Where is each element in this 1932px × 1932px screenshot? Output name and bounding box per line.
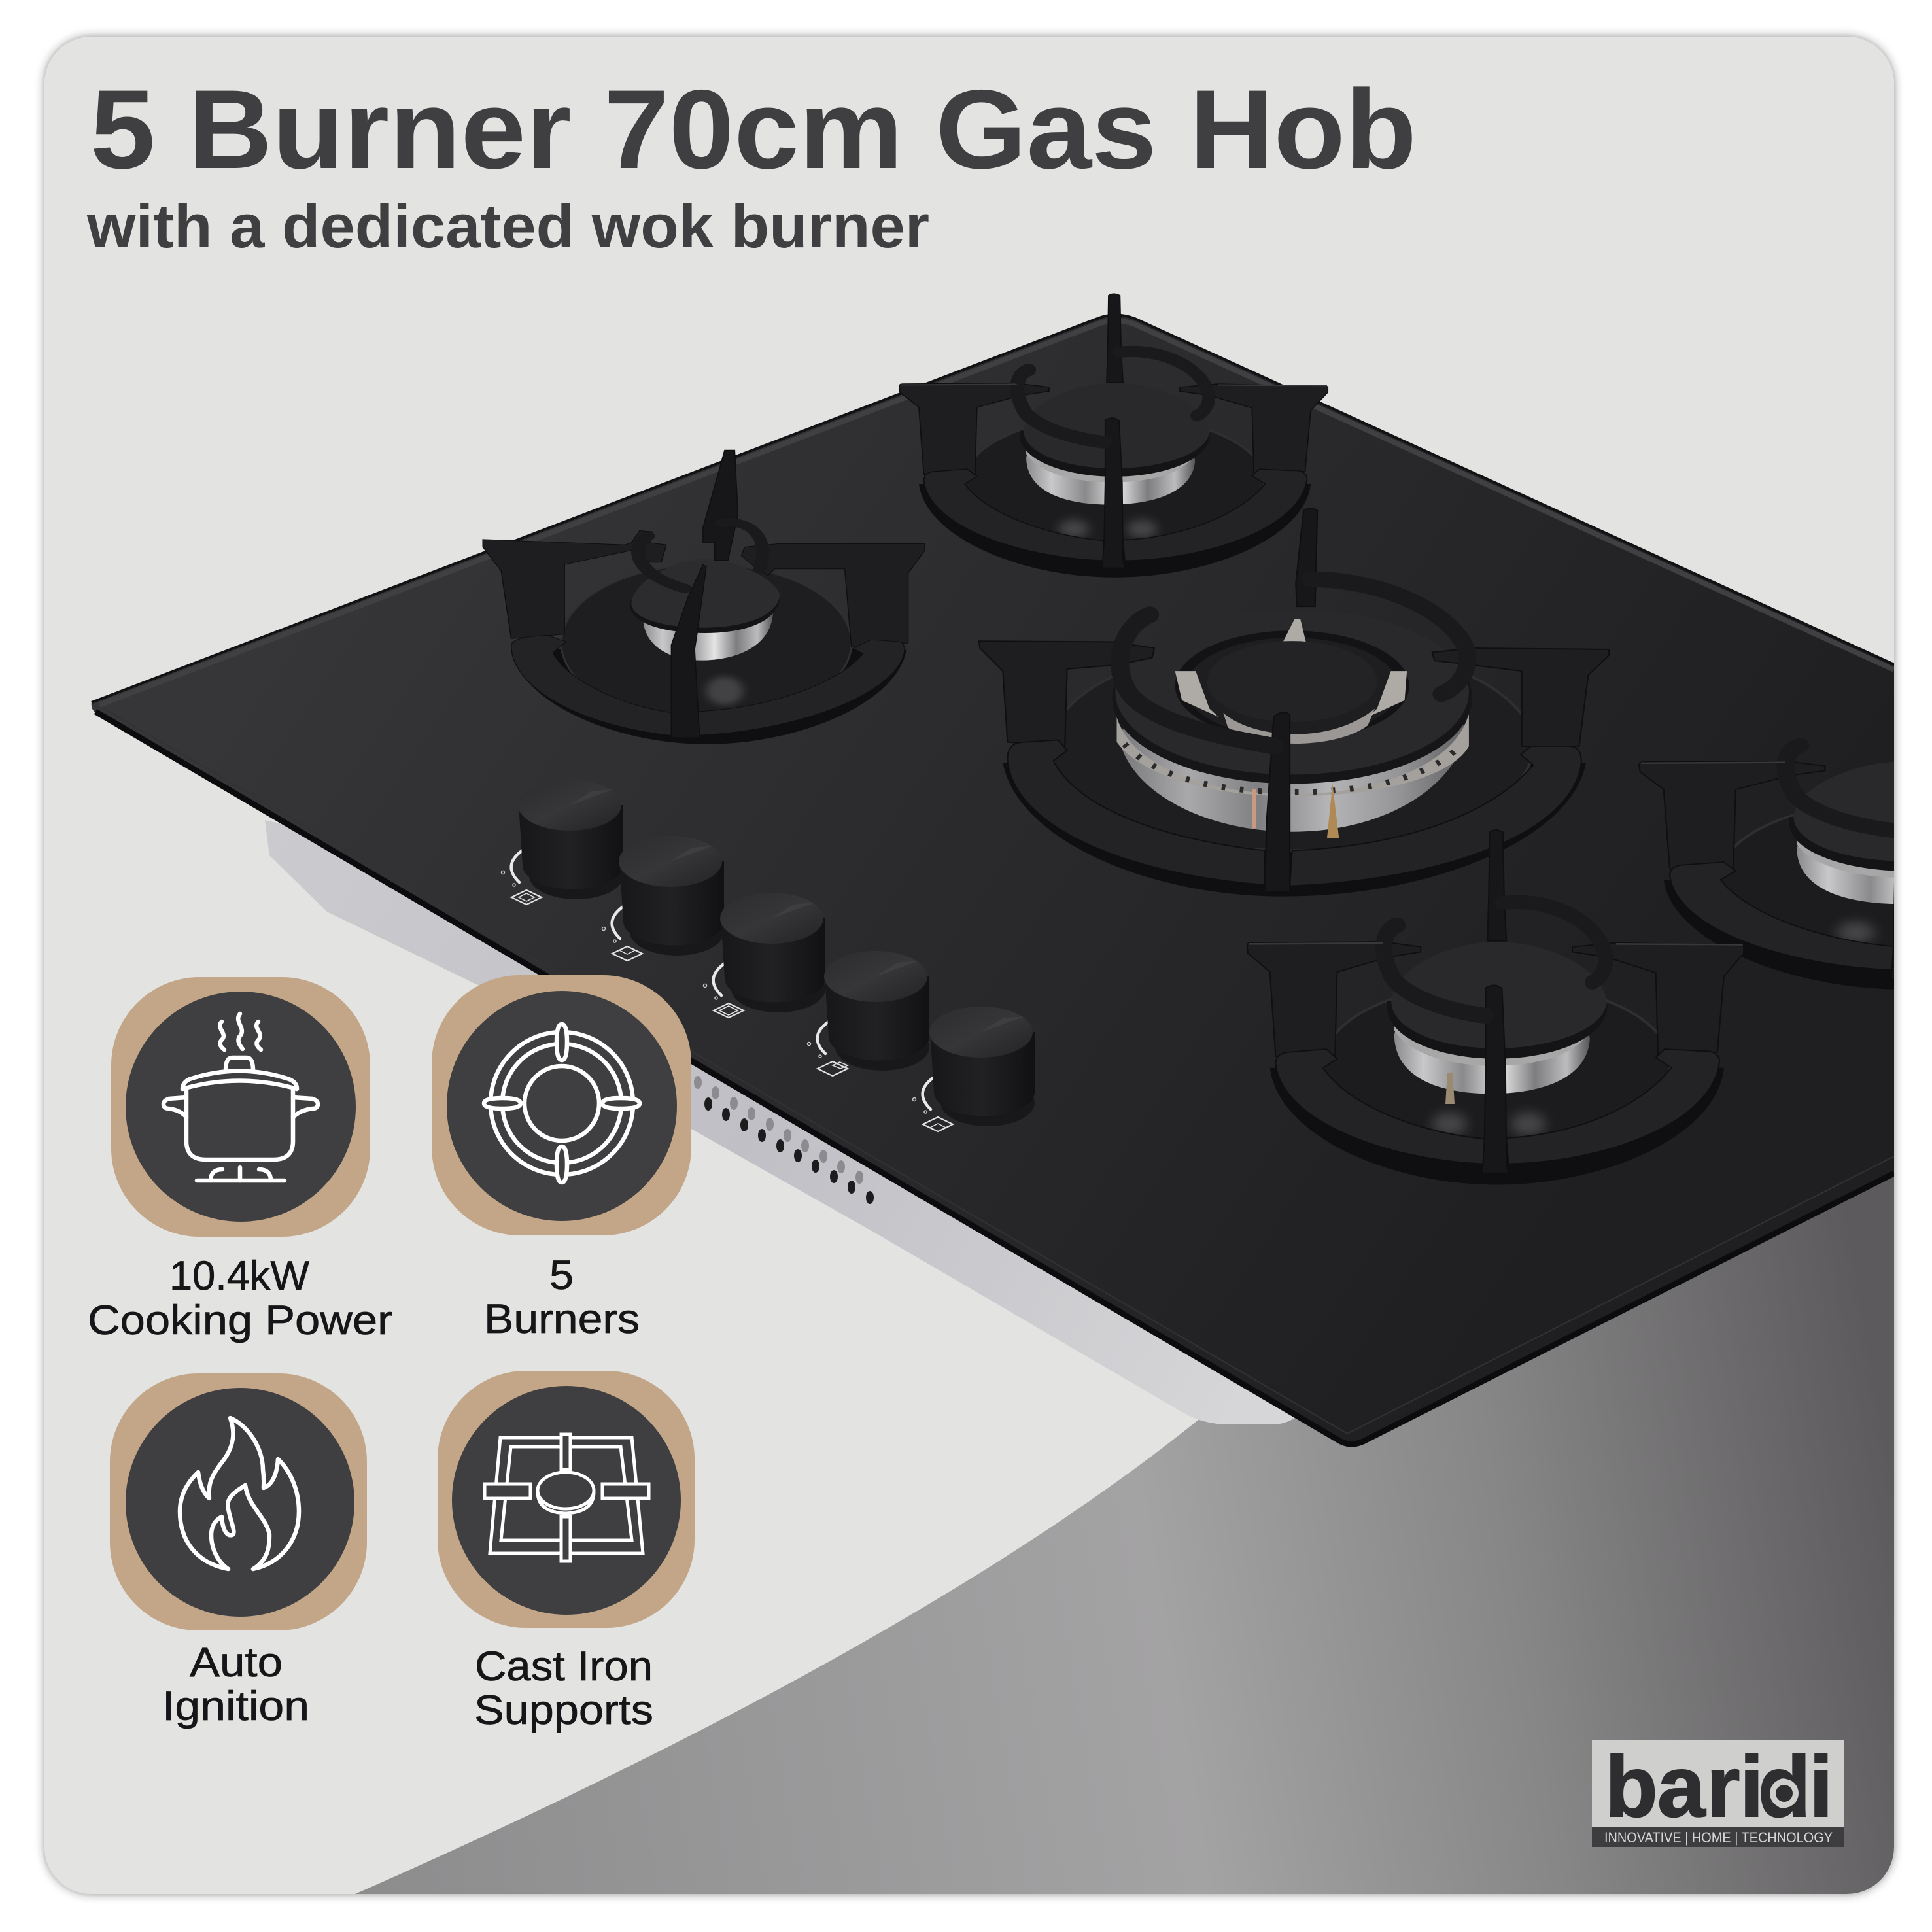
tile: tan badge [110,1373,367,1630]
icon: pan support [485,1434,649,1561]
burner: front right [1247,830,1744,1184]
igniter pin [1445,1073,1455,1104]
burner: right partial [1639,656,1932,990]
knob 3 [704,893,825,1018]
tile: tan badge [438,1371,695,1628]
icon disc [126,992,356,1222]
logo: baridi [1592,1738,1844,1847]
control knobs [501,780,1035,1131]
icon: steaming pot [164,1014,318,1181]
icon disc [447,991,677,1221]
tagline: INNOVATIVE | HOME | TECHNOLOGY [1604,1829,1833,1846]
feature: auto ignition [110,1373,367,1729]
wordmark: baridi [1605,1738,1833,1835]
label line 2: Ignition [162,1683,309,1729]
logo ring on d [1770,1779,1799,1808]
label: Cast Iron [475,1644,653,1689]
feature: cooking power [88,977,392,1343]
icon: flame [180,1418,299,1569]
feature: cast iron supports [438,1371,695,1733]
knob 2 [602,836,724,961]
label: 5 [549,1252,574,1298]
knob 1 [501,780,623,905]
icon: burner rings [484,1024,640,1182]
black glass hob top [92,315,1894,1445]
subtitle: with a dedicated wok burner [86,192,929,260]
icon disc [126,1388,354,1617]
product scene: floor and gas hob [92,294,1932,1894]
label: 10.4kW [169,1253,310,1299]
vent holes [694,1076,874,1204]
label line 2: Cooking Power [88,1298,392,1343]
tile: tan badge [432,975,691,1235]
burner: back [899,294,1328,578]
knob 4 [807,951,929,1076]
label: Auto [190,1640,283,1685]
feature: burners [432,975,691,1342]
knob 5 [913,1007,1035,1131]
burner: left [483,450,925,744]
stainless steel hob body [265,820,1308,1424]
title: 5 Burner 70cm Gas Hob [90,67,1417,192]
icon disc [452,1386,681,1615]
burner: wok centre [979,508,1609,897]
label line 2: Burners [484,1296,640,1342]
label line 2: Supports [474,1687,653,1733]
floor gradient area [355,1177,1894,1894]
tile: tan badge [111,977,370,1237]
